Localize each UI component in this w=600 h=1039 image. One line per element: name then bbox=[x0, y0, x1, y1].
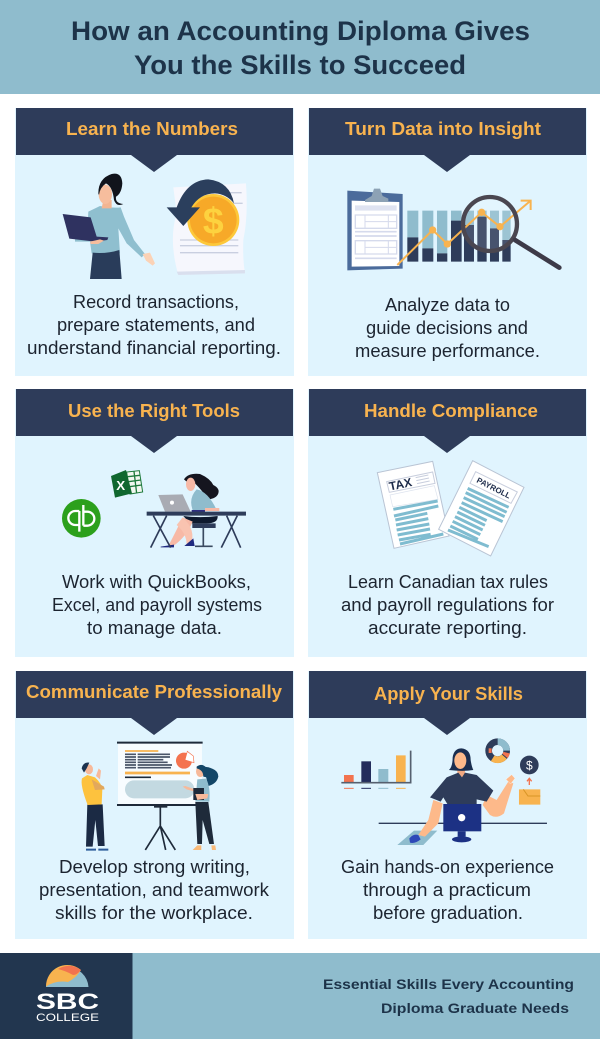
heading: turn data into insight bbox=[309, 108, 586, 172]
body text: accurate reporting. bbox=[368, 618, 527, 638]
body text bbox=[52, 572, 262, 638]
body text bbox=[39, 857, 270, 923]
body text bbox=[341, 572, 554, 638]
logo: SBC College: SBC bbox=[36, 989, 99, 1014]
icon: tax form: TAX bbox=[388, 475, 413, 494]
icon: excel logo: X bbox=[116, 478, 125, 493]
panel: learn the numbers bbox=[15, 108, 294, 376]
icon: woman at computer bbox=[379, 748, 547, 845]
body text: Develop strong writing, bbox=[59, 857, 250, 877]
heading: learn the numbers bbox=[16, 108, 293, 172]
chart: donut bbox=[489, 742, 507, 760]
icon: man in yellow shirt bbox=[82, 763, 108, 851]
logo: SBC College: COLLEGE bbox=[36, 1012, 99, 1024]
title banner bbox=[0, 0, 600, 94]
icon: woman at desk with laptop bbox=[147, 474, 246, 548]
body text: Gain hands-on experience bbox=[341, 857, 554, 877]
heading: apply your skills bbox=[309, 671, 586, 735]
title bbox=[71, 16, 530, 80]
chart: bars with trend line and magnifier bbox=[397, 197, 559, 268]
heading: use the right tools: Use the Right Tools bbox=[68, 400, 240, 421]
icon: dollar coin, arrow and folder: $ bbox=[526, 758, 533, 772]
body text: to manage data. bbox=[87, 618, 222, 638]
body text: Record transactions, bbox=[73, 292, 239, 312]
icon: dollar coin, arrow and folder bbox=[519, 756, 540, 805]
panel: turn data into insight bbox=[308, 108, 587, 376]
footer tagline bbox=[323, 976, 574, 1016]
panel: use the right tools bbox=[15, 389, 294, 657]
body text: measure performance. bbox=[355, 341, 540, 361]
body text: Learn Canadian tax rules bbox=[348, 572, 548, 592]
body text: understand financial reporting. bbox=[27, 338, 281, 358]
logo: SBC College bbox=[36, 965, 99, 1024]
panel: apply your skills bbox=[308, 671, 587, 939]
heading: apply your skills: Apply Your Skills bbox=[374, 683, 523, 704]
chart: bar chart bbox=[341, 751, 411, 788]
icon: quickbooks logo bbox=[62, 499, 101, 538]
icon: excel logo bbox=[111, 470, 143, 498]
panel: communicate professionally bbox=[15, 671, 294, 939]
footer tagline: Essential Skills Every Accounting bbox=[323, 976, 574, 992]
icon: clipboard bbox=[347, 189, 403, 270]
footer tagline: Diploma Graduate Needs bbox=[381, 1000, 569, 1016]
heading: use the right tools bbox=[16, 389, 293, 453]
heading: communicate professionally: Communicate Professionally bbox=[26, 681, 283, 702]
body text: Excel, and payroll systems bbox=[52, 595, 262, 615]
body text: guide decisions and bbox=[366, 318, 528, 338]
icon: presentation board bbox=[117, 743, 203, 850]
body text: and payroll regulations for bbox=[341, 595, 554, 615]
icon: document with dollar coin bbox=[167, 179, 247, 275]
body text bbox=[355, 295, 540, 361]
body text bbox=[27, 292, 281, 358]
icon: woman with laptop bbox=[63, 174, 155, 279]
heading: turn data into insight: Turn Data into Insight bbox=[345, 118, 541, 139]
icon: payroll form: PAYROLL bbox=[475, 476, 512, 501]
icon: payroll form bbox=[439, 461, 524, 556]
body text bbox=[341, 857, 554, 923]
footer bbox=[0, 953, 600, 1039]
body text: before graduation. bbox=[373, 903, 523, 923]
heading: learn the numbers: Learn the Numbers bbox=[66, 118, 238, 139]
title: How an Accounting Diploma Gives bbox=[71, 16, 530, 46]
body text: through a practicum bbox=[363, 880, 531, 900]
heading: communicate professionally bbox=[16, 671, 293, 735]
title: You the Skills to Succeed bbox=[134, 50, 466, 80]
heading: handle compliance bbox=[309, 389, 586, 453]
icon: document with dollar coin: $ bbox=[203, 199, 224, 241]
body text: skills for the workplace. bbox=[55, 903, 253, 923]
body text: Work with QuickBooks, bbox=[62, 572, 251, 592]
heading: handle compliance: Handle Compliance bbox=[364, 400, 538, 421]
body text: Analyze data to bbox=[385, 295, 510, 315]
icon: tax form bbox=[377, 461, 449, 548]
body text: presentation, and teamwork bbox=[39, 880, 270, 900]
icon: woman presenting bbox=[183, 765, 218, 850]
panel: handle compliance bbox=[308, 389, 587, 657]
body text: prepare statements, and bbox=[57, 315, 255, 335]
